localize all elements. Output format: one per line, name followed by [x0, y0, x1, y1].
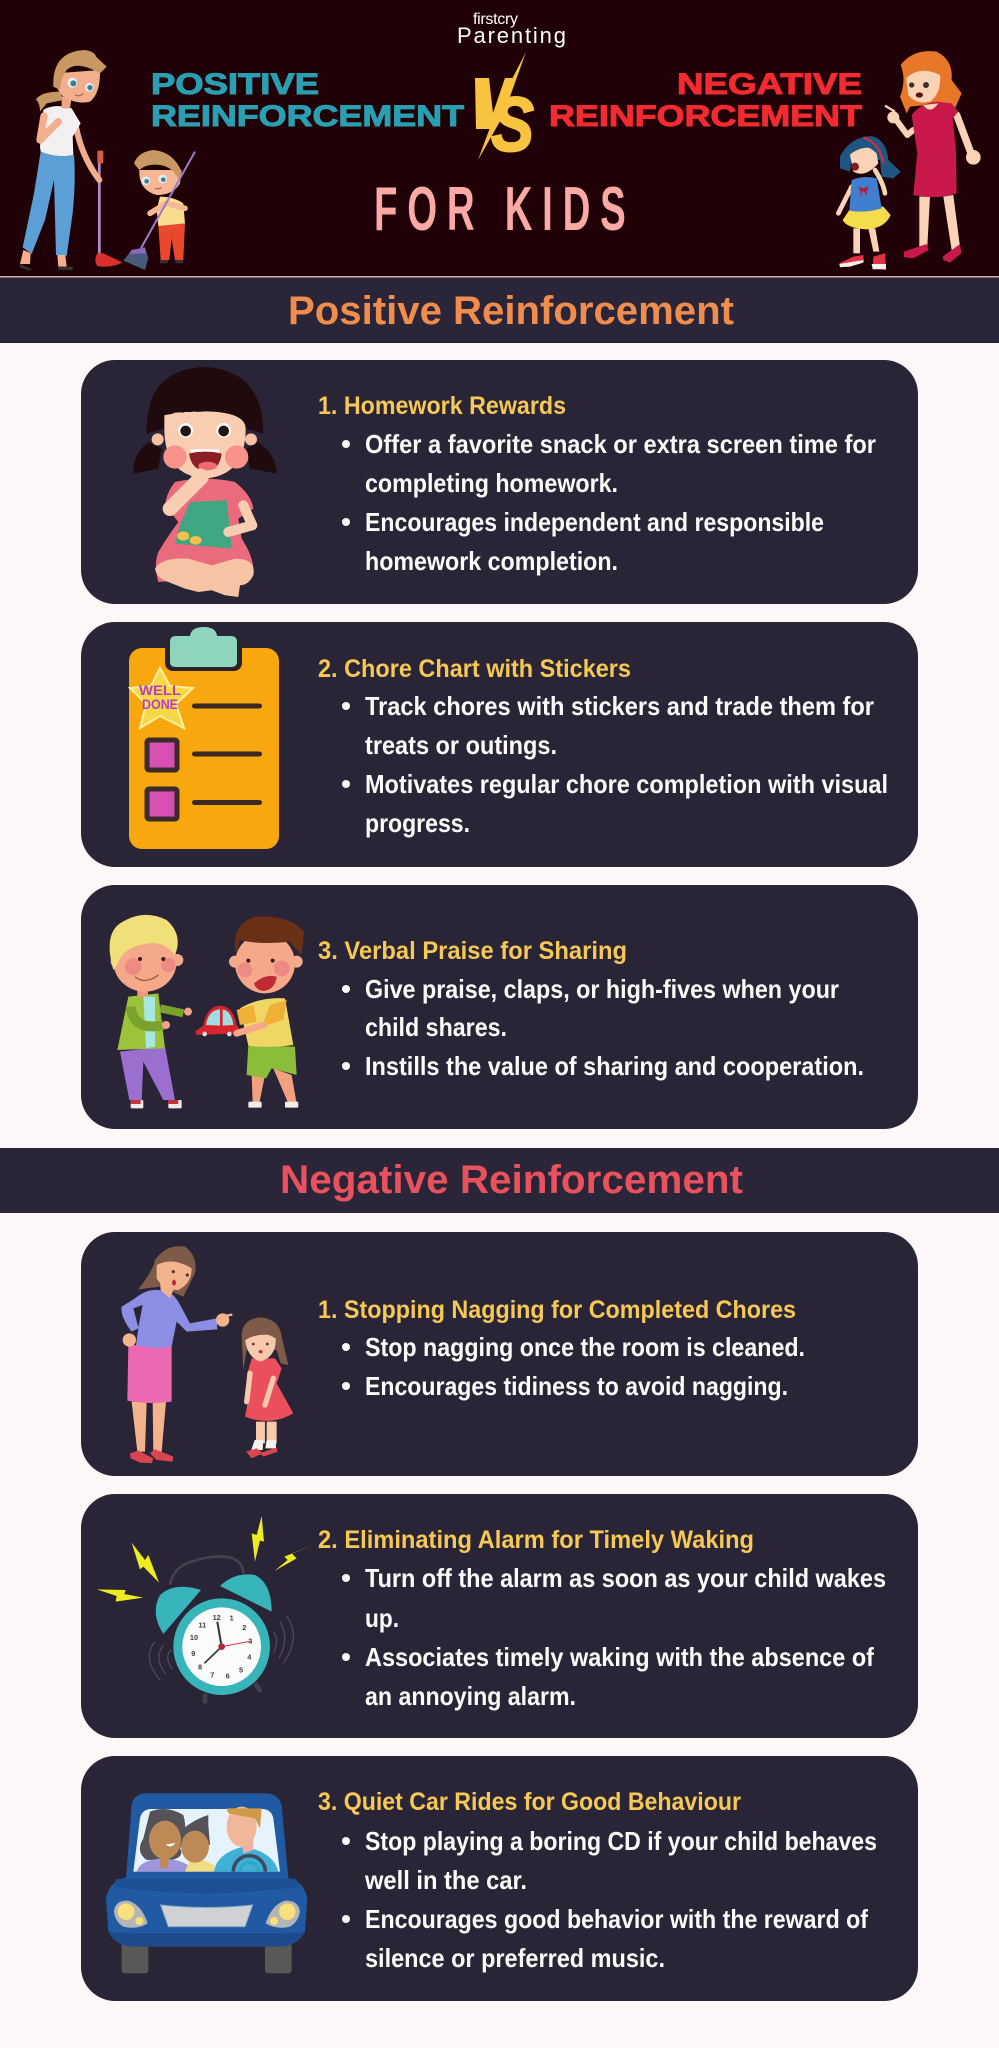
illustration: ringing alarm clock — [97, 1516, 313, 1703]
panel: stopping nagging — [81, 1232, 918, 1476]
panel: verbal praise — [81, 885, 918, 1129]
bullet list — [342, 1332, 805, 1401]
bullet list: Turn off the alarm as soon as your child wakes — [365, 1563, 886, 1593]
bullet list: well in the car. — [364, 1865, 527, 1895]
section band: negative reinforcement: Negative Reinforcement — [280, 1158, 743, 1202]
illustration: ringing alarm clock: 5 — [239, 1666, 243, 1675]
bullet list: an annoying alarm. — [365, 1681, 576, 1711]
bullet list: Instills the value of sharing and cooperation. — [365, 1051, 864, 1081]
illustration: family in blue car — [106, 1793, 307, 1973]
bullet list: Stop playing a boring CD if your child behaves — [365, 1826, 877, 1856]
illustration: ringing alarm clock: 7 — [210, 1671, 214, 1680]
panel: chore chart — [81, 622, 918, 867]
bullet list: progress. — [365, 808, 470, 838]
bullet list — [342, 1563, 886, 1711]
panel: quiet car rides — [81, 1756, 918, 2001]
illustration: ringing alarm clock: 6 — [226, 1671, 230, 1680]
illustration: girl eating snacks — [133, 367, 277, 597]
panel: eliminating alarm — [81, 1494, 918, 1738]
bullet list: silence or preferred music. — [365, 1943, 665, 1973]
illustration: ringing alarm clock: 1 — [230, 1614, 234, 1623]
panel: homework rewards — [81, 360, 918, 604]
logo: Parenting — [457, 23, 566, 48]
section band: positive reinforcement — [0, 278, 999, 343]
bullet list: Encourages tidiness to avoid nagging. — [365, 1371, 788, 1401]
bullet list: completing homework. — [365, 468, 618, 498]
bullet list: child shares. — [365, 1012, 507, 1042]
bullet list — [342, 974, 864, 1081]
VS emblem — [475, 52, 534, 168]
VS emblem: S — [491, 82, 534, 168]
bullet list: treats or outings. — [365, 730, 557, 760]
subtitle: for kids: FOR KIDS — [374, 174, 626, 243]
heading: positive reinforcement — [151, 68, 464, 133]
section band: negative reinforcement — [0, 1148, 999, 1213]
bullet list: up. — [365, 1603, 399, 1633]
illustration: clipboard chart — [129, 627, 279, 849]
illustration: ringing alarm clock: 3 — [248, 1637, 252, 1646]
bullet list: Encourages good behavior with the reward of — [365, 1904, 868, 1934]
illustration: mother scolding daughter — [121, 1246, 293, 1463]
bullet list: Track chores with stickers and trade them for — [365, 691, 874, 721]
header banner — [0, 0, 999, 278]
illustration: angry mother and crying girl — [838, 51, 981, 270]
heading: 3. Verbal Praise for Sharing — [318, 937, 627, 965]
heading: negative reinforcement: NEGATIVE — [677, 68, 862, 101]
illustration: ringing alarm clock: 2 — [242, 1623, 246, 1632]
bullet list — [342, 1826, 877, 1973]
illustration: ringing alarm clock: 11 — [198, 1621, 206, 1630]
bullet list: homework completion. — [365, 546, 618, 576]
illustration: ringing alarm clock: 4 — [247, 1652, 252, 1661]
illustration: mother with mop and boy with broom — [20, 50, 195, 271]
section band: positive reinforcement: Positive Reinforcement — [288, 289, 734, 333]
bullet list — [342, 429, 876, 576]
illustration: ringing alarm clock: 10 — [190, 1633, 198, 1642]
bullet list: Stop nagging once the room is cleaned. — [365, 1332, 805, 1362]
heading: 1. Homework Rewards — [318, 392, 566, 420]
heading: positive reinforcement: REINFORCEMENT — [151, 100, 464, 133]
illustration: ringing alarm clock: 8 — [198, 1662, 202, 1671]
bullet list: Associates timely waking with the absence of — [365, 1642, 874, 1672]
heading: negative reinforcement: REINFORCEMENT — [549, 100, 862, 133]
logo: firstcry — [473, 11, 518, 28]
illustration: ringing alarm clock: 9 — [191, 1649, 195, 1658]
bullet list: Offer a favorite snack or extra screen time for — [365, 429, 876, 459]
illustration: clipboard chart: WELL — [139, 682, 181, 698]
bullet list — [342, 691, 888, 838]
heading: positive reinforcement: POSITIVE — [151, 68, 319, 101]
heading: 2. Chore Chart with Stickers — [318, 655, 631, 683]
heading: 1. Stopping Nagging for Completed Chores — [318, 1296, 796, 1324]
bullet list: Give praise, claps, or high-fives when your — [365, 974, 839, 1004]
bullet list: Encourages independent and responsible — [365, 507, 824, 537]
logo — [457, 11, 566, 48]
heading: negative reinforcement — [549, 68, 862, 133]
bullet list: Motivates regular chore completion with visual — [365, 769, 888, 799]
illustration: ringing alarm clock: 12 — [213, 1613, 221, 1622]
heading: 3. Quiet Car Rides for Good Behaviour — [318, 1788, 741, 1816]
heading: 2. Eliminating Alarm for Timely Waking — [318, 1526, 754, 1554]
illustration: clipboard chart: DONE — [142, 696, 178, 712]
illustration: children sharing a toy car — [110, 915, 304, 1108]
